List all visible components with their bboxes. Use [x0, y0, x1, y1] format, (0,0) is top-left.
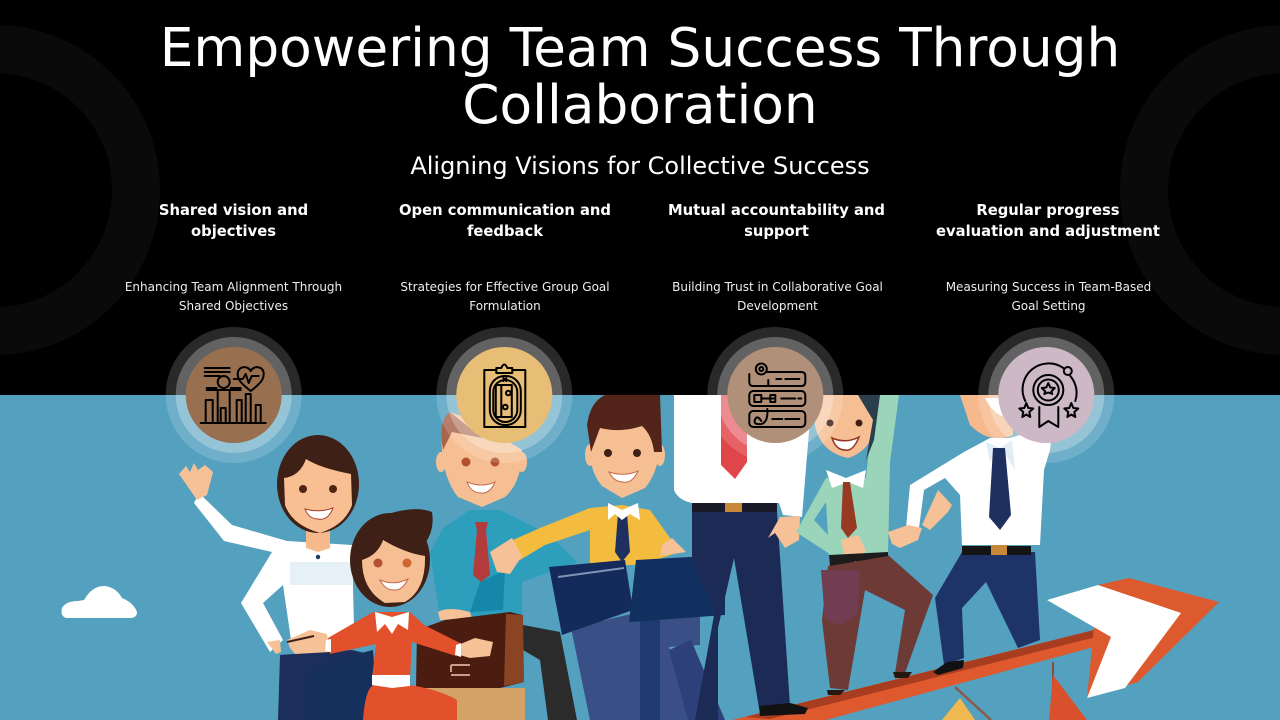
heading: shared vision: Shared vision and [159, 202, 308, 219]
person: woman in red [287, 509, 493, 720]
text: mutual accountability [672, 280, 883, 313]
text: regular progress [946, 280, 1151, 313]
text: mutual accountability: Building Trust in Collaborative Goal [672, 280, 883, 294]
cloud [62, 586, 137, 618]
icon: checklist [707, 327, 843, 463]
person: man in green [796, 395, 933, 695]
heading: open communication: Open communication and [399, 202, 611, 219]
person: man with navy tie [888, 395, 1053, 675]
title: Collaboration [462, 73, 818, 136]
heading: regular progress: evaluation and adjustment [936, 223, 1160, 240]
heading: mutual accountability [668, 202, 885, 240]
text: shared vision: Shared Objectives [179, 299, 288, 313]
text: regular progress: Goal Setting [1011, 299, 1086, 313]
person: man in teal shirt [430, 412, 577, 720]
text: regular progress: Measuring Success in Team-Based [946, 280, 1151, 294]
heading: regular progress [936, 202, 1160, 240]
heading: shared vision [159, 202, 308, 240]
heading: mutual accountability: support [744, 223, 809, 240]
icon: clipboard [436, 327, 572, 463]
icon: health chart [166, 327, 302, 463]
subtitle: Aligning Visions for Collective Success [410, 152, 870, 180]
heading: open communication: feedback [467, 223, 543, 240]
briefcase and box [410, 612, 525, 720]
heading: shared vision: objectives [191, 223, 276, 240]
text: shared vision: Enhancing Team Alignment Through [125, 280, 342, 294]
heading: regular progress: Regular progress [976, 202, 1120, 219]
title [160, 16, 1120, 136]
icon: award [978, 327, 1114, 463]
text: open communication: Strategies for Effective Group Goal [400, 280, 610, 294]
heading: open communication [399, 202, 611, 240]
text: open communication: Formulation [469, 299, 541, 313]
title: Empowering Team Success Through [160, 16, 1120, 79]
text: open communication [400, 280, 610, 313]
arrow [732, 578, 1219, 720]
person: tall man with red tie [669, 395, 812, 720]
person: man in yellow [490, 395, 725, 720]
person: woman in white [179, 435, 376, 720]
text: shared vision [125, 280, 342, 313]
heading: mutual accountability: Mutual accountability and [668, 202, 885, 219]
text: mutual accountability: Development [737, 299, 818, 313]
